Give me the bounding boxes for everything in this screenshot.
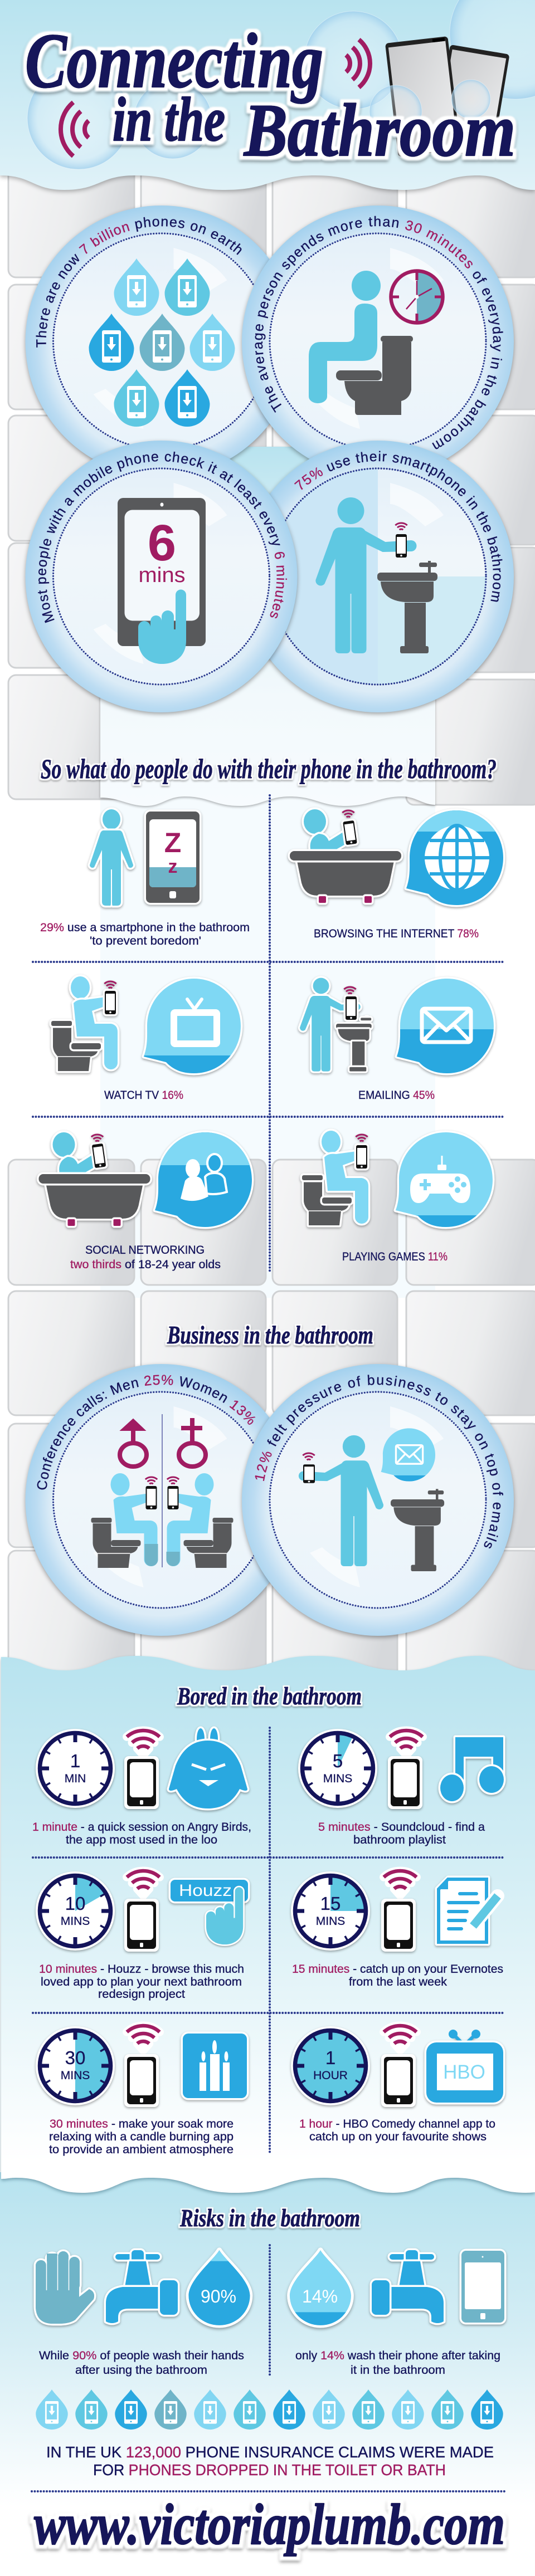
- Houzz button: Houzz: [179, 1881, 232, 1900]
- curved caption: Most people with a mobile phone check it at least every 6 minutes: [38, 451, 287, 623]
- caption: BROWSING THE INTERNET 78%: [314, 927, 479, 940]
- curved caption: The average person spends more than 30 minutes of everyday in the bathroom: [255, 216, 503, 449]
- caption: WATCH TV 16%: [104, 1089, 183, 1102]
- tablet: 6: [148, 515, 176, 571]
- caption: [295, 2349, 500, 2377]
- person on toilet: [302, 1131, 368, 1225]
- panel: prevent boredom: [40, 809, 250, 947]
- bottom white fade: [0, 2506, 535, 2576]
- caption: SOCIAL NETWORKING: [85, 1244, 205, 1257]
- curved caption: 12% felt pressure of business to stay on top of emails: [255, 1375, 503, 1548]
- caption: 10 minutes - Houzz - browse this much: [39, 1963, 244, 1976]
- caption: [299, 2118, 495, 2143]
- panel: social networking: [39, 1124, 261, 1271]
- signal: [127, 1731, 159, 1755]
- caption: [40, 921, 250, 947]
- caption: [32, 1821, 251, 1846]
- signal: [127, 1871, 159, 1895]
- clock: MINS: [61, 2069, 90, 2082]
- caption: redesign project: [98, 1988, 185, 2001]
- row of falling phone drops: [36, 2389, 503, 2430]
- caption: 'to prevent boredom': [90, 935, 201, 947]
- candles: [183, 2034, 247, 2098]
- person in bath: [39, 1132, 150, 1226]
- panel: emailing: [300, 978, 503, 1102]
- female symbol: [179, 1418, 206, 1467]
- phone: [124, 2054, 159, 2107]
- panel: browsing: [290, 802, 512, 940]
- people bubble: [149, 1124, 261, 1227]
- signal: [384, 1871, 416, 1895]
- music note: [440, 1737, 504, 1801]
- wall tiles: lower: [8, 1160, 535, 1684]
- TV bubble: [138, 979, 250, 1078]
- panel: 7 billion phones: [22, 204, 272, 461]
- section background: risks: [0, 2172, 535, 2576]
- phone: [461, 2251, 504, 2323]
- seated person and toilet: [309, 271, 413, 415]
- panel: playing games: [302, 1131, 502, 1263]
- caption: EMAILING 45%: [358, 1089, 435, 1102]
- phone with Zz: Z: [164, 827, 181, 858]
- envelope bubble: [391, 979, 503, 1079]
- clock: HOUR: [313, 2069, 348, 2082]
- phone: [124, 1756, 159, 1809]
- caption: 29% use a smartphone in the bathroom: [40, 921, 250, 934]
- section background: bored: [1, 1656, 535, 2193]
- male symbol: [120, 1419, 147, 1467]
- clock: [36, 1871, 115, 1951]
- header wave background: [0, 0, 535, 190]
- tablet: mins: [138, 564, 185, 587]
- lower light band: [100, 796, 435, 1298]
- person at sink: [300, 978, 372, 1072]
- panel: 1 minute: [32, 1728, 251, 1846]
- HBO TV: HBO: [443, 2061, 485, 2083]
- insurance claims statement: IN THE UK 123,000 PHONE INSURANCE CLAIMS WERE MADE: [46, 2443, 494, 2461]
- drops with phones: [89, 258, 235, 427]
- drop 14%: [283, 2250, 358, 2330]
- clock: [36, 1729, 115, 1808]
- caption: bathroom playlist: [353, 1834, 446, 1846]
- men on toilet: [91, 1473, 158, 1568]
- panel: 15 minutes: [291, 1871, 503, 1988]
- signal arcs left: [61, 102, 89, 156]
- panel: business pressure: [239, 1363, 516, 1640]
- curved caption: There are now 7 billion phones on earth: [36, 217, 242, 348]
- heading: business: Business in the bathroom: [167, 1321, 373, 1349]
- caption: to provide an ambient atmosphere: [49, 2143, 234, 2156]
- panel: 5 minutes: [298, 1729, 504, 1846]
- title: Connecting: [25, 18, 323, 104]
- clock: 5: [333, 1751, 343, 1771]
- panel: 75 percent: [242, 441, 514, 712]
- caption: While 90% of people wash their hands: [39, 2349, 244, 2362]
- HBO TV: [426, 2030, 503, 2103]
- caption: only 14% wash their phone after taking: [295, 2349, 500, 2362]
- panel: conference calls: [26, 1364, 298, 1636]
- drop 90%: 90%: [201, 2286, 236, 2306]
- caption: after using the bathroom: [75, 2364, 207, 2377]
- panel: header: [0, 0, 535, 190]
- panel: watch TV: [51, 976, 250, 1102]
- phone: [303, 1464, 315, 1483]
- panel: 30 minutes app: [36, 2026, 247, 2156]
- clock: MIN: [65, 1772, 86, 1785]
- vertical divider: [269, 2245, 271, 2375]
- clock: 1: [325, 2047, 335, 2068]
- insurance claims statement: [46, 2443, 494, 2479]
- globe bubble: [401, 802, 512, 905]
- caption: 15 minutes - catch up on your Evernotes: [292, 1963, 503, 1976]
- panel: every 6 minutes: [26, 441, 298, 712]
- caption: 1 hour - HBO Comedy channel app to: [299, 2118, 495, 2130]
- heading: bored: Bored in the bathroom: [177, 1683, 362, 1710]
- insurance claims statement: FOR PHONES DROPPED IN THE TOILET OR BATH: [93, 2461, 446, 2479]
- two tablets: [385, 36, 510, 159]
- caption: the app most used in the loo: [66, 1834, 217, 1846]
- pointing hand: [138, 590, 186, 664]
- bird: [169, 1728, 247, 1808]
- phone: [381, 1899, 416, 1952]
- tap: [372, 2250, 444, 2323]
- phone: [396, 534, 407, 558]
- clock: 15: [320, 1893, 341, 1914]
- document: [437, 1878, 498, 1944]
- clock: [391, 271, 442, 323]
- panel: 14 percent wash phone: [283, 2250, 504, 2377]
- caption: [49, 2118, 234, 2156]
- caption: PLAYING GAMES 11%: [342, 1250, 448, 1263]
- caption: 30 minutes - make your soak more: [50, 2118, 234, 2130]
- person on toilet: [51, 976, 118, 1071]
- sink: [377, 561, 437, 653]
- phone: [388, 1756, 422, 1809]
- panel: 30 minutes: [239, 205, 516, 461]
- pointing hand: [206, 1887, 243, 1944]
- caption: loved app to plan your next bathroom: [41, 1976, 242, 1988]
- phone with Zz: [146, 812, 200, 903]
- tap: [106, 2250, 178, 2323]
- small bubbles: [369, 80, 490, 138]
- caption: two thirds of 18-24 year olds: [70, 1258, 221, 1271]
- divider: [162, 1414, 163, 1567]
- caption: [39, 2349, 244, 2377]
- signal: [303, 1453, 315, 1460]
- signal: [384, 2026, 416, 2050]
- email bubble: [378, 1428, 440, 1485]
- soap bubbles: [27, 0, 535, 169]
- caption: [39, 1963, 244, 2001]
- gamepad bubble: [390, 1132, 502, 1232]
- caption: it in the bathroom: [351, 2364, 445, 2377]
- title: [25, 18, 515, 172]
- clock: 1: [70, 1751, 80, 1771]
- caption: 5 minutes - Soundcloud - find a: [318, 1821, 485, 1834]
- panel: 1 hour: [291, 2026, 503, 2143]
- phone with Zz: z: [168, 856, 177, 877]
- caption: [292, 1963, 503, 1988]
- signal: [390, 1731, 422, 1755]
- panel: 10 minutes: [36, 1871, 248, 2001]
- person in bath: [290, 809, 401, 903]
- grid dividers: [33, 1728, 505, 2153]
- caption: catch up on your favourite shows: [309, 2130, 487, 2143]
- grid dividers: [33, 795, 505, 1273]
- clock: [298, 1729, 377, 1808]
- signal: [395, 523, 407, 530]
- clock: MINS: [316, 1915, 345, 1928]
- upper light band with wavy bottom: [100, 447, 435, 806]
- signal: [127, 2026, 159, 2050]
- wall tiles: upper: [8, 145, 535, 805]
- shaded quadrant lower right: [378, 576, 486, 685]
- phone: [381, 2054, 416, 2107]
- person with phone: [315, 497, 417, 653]
- shaded quadrants: [270, 468, 378, 685]
- clock: [36, 2026, 115, 2105]
- curved caption: 75% use their smartphone in the bathroom: [294, 451, 503, 602]
- title: in the: [113, 85, 225, 154]
- panel: 90 percent wash hands: [36, 2250, 257, 2377]
- clock: [291, 2026, 370, 2105]
- heading: risks: Risks in the bathroom: [179, 2204, 360, 2232]
- person with phone: [299, 1435, 383, 1566]
- clock: [291, 1871, 370, 1951]
- drop 90%: [182, 2250, 257, 2325]
- Houzz button: [171, 1880, 248, 1902]
- sink: [391, 1489, 444, 1571]
- clock: 10: [65, 1893, 85, 1914]
- caption: from the last week: [349, 1976, 448, 1988]
- women on toilet: [166, 1473, 233, 1568]
- caption: 1 minute - a quick session on Angry Birds,: [32, 1821, 251, 1834]
- phone: [124, 1899, 159, 1952]
- drop 14%: 14%: [302, 2286, 338, 2306]
- caption: [318, 1821, 485, 1846]
- standing person: [90, 809, 133, 906]
- clock: 30: [65, 2047, 85, 2068]
- clock: MINS: [61, 1915, 90, 1928]
- curved caption: Conference calls: Men 25% Women 13%: [37, 1375, 255, 1489]
- clock: MINS: [323, 1772, 352, 1785]
- hand: [36, 2251, 94, 2324]
- signal arcs right: [346, 40, 370, 87]
- caption: [70, 1244, 221, 1271]
- tablet: [118, 498, 206, 646]
- caption: relaxing with a candle burning app: [49, 2130, 234, 2143]
